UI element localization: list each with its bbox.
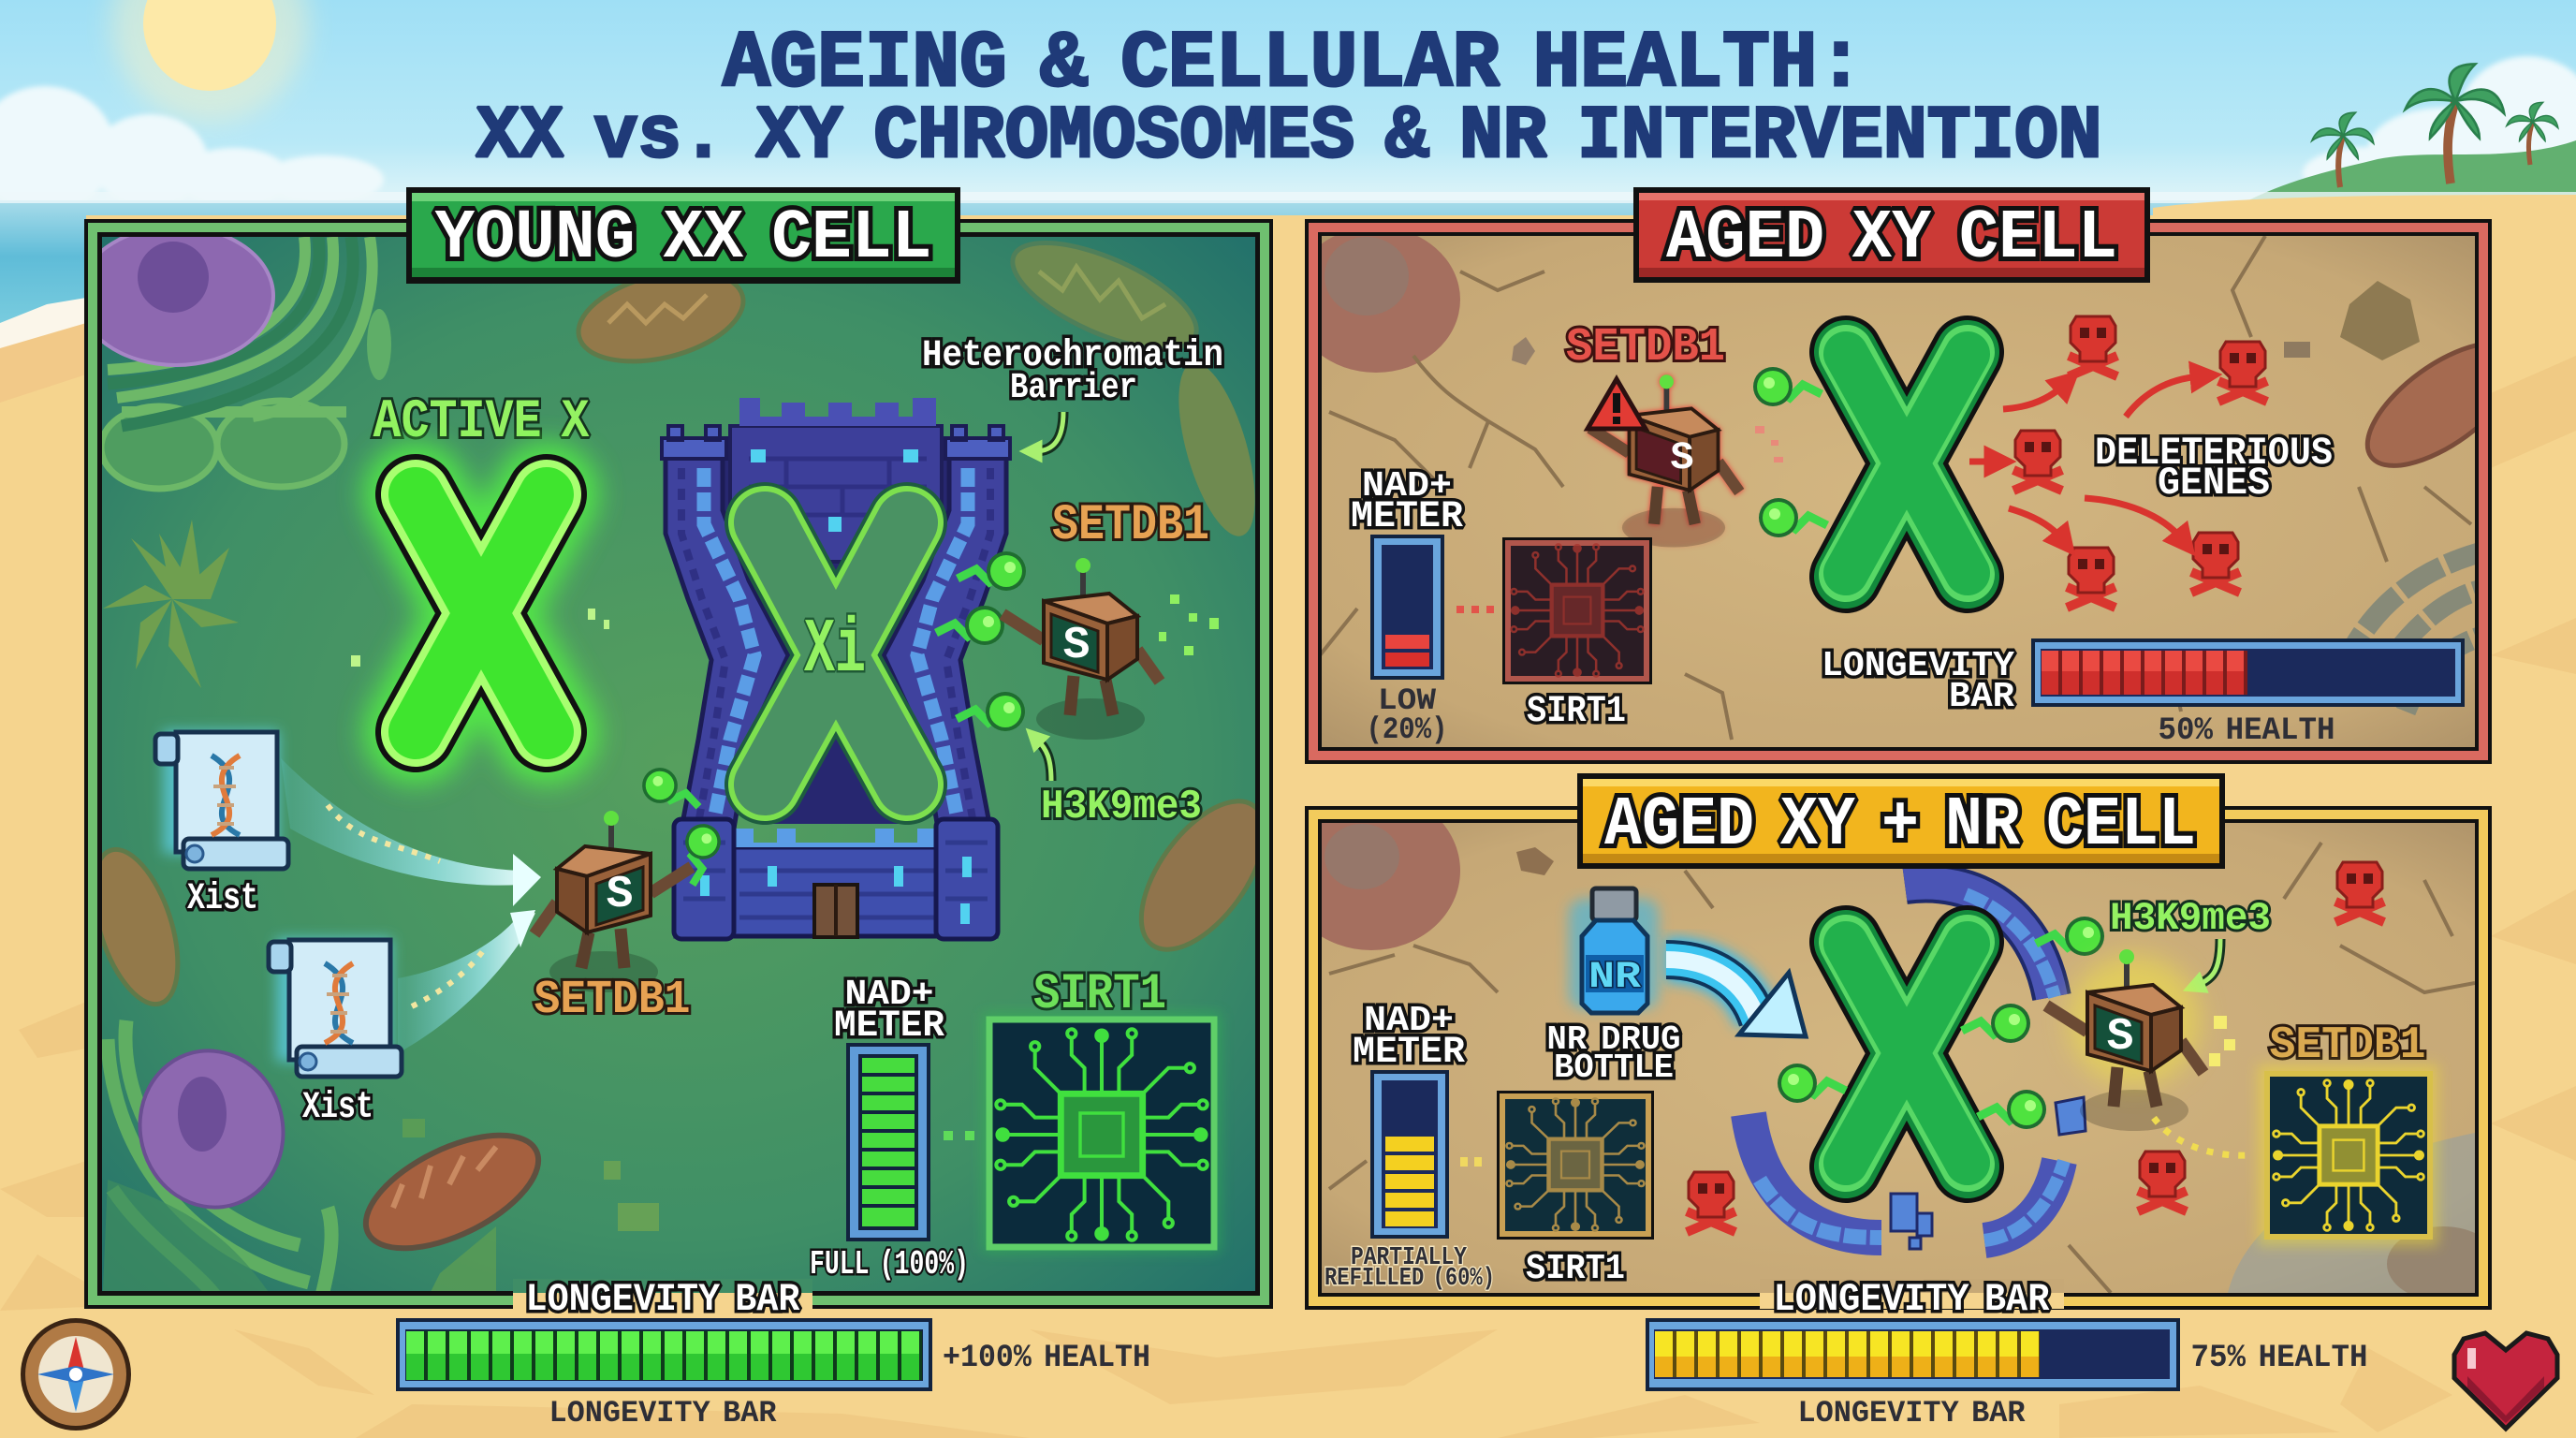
SIRT1 chip dim (1499, 1093, 1652, 1238)
castle side walls (662, 426, 1010, 829)
H3K9me3 marks restored (1778, 917, 2104, 1129)
label: SETDB1 gold: SETDB1 (2269, 1020, 2426, 1071)
cell organelles background (77, 221, 1288, 1311)
label: longevity bar aged (1822, 646, 2014, 717)
icon: compass (21, 1318, 131, 1431)
arrow: H3K9me3 (1037, 740, 1051, 781)
aged X chromosome rescued (1846, 942, 1968, 1167)
castle back wall (730, 398, 942, 562)
red arrows from X to genes (1969, 376, 2200, 538)
label: H3K9me3: H3K9me3 (1041, 784, 1202, 830)
robot: SETDB1 lower (534, 811, 692, 992)
longevity bar aged (2031, 638, 2465, 707)
text: partially refilled (1325, 1244, 1495, 1293)
dotted link: SETDB1 to SIRT1 (2154, 1118, 2248, 1155)
longevity bar NR (1646, 1318, 2180, 1391)
label: longevity bar aged: BAR (1949, 677, 2014, 717)
text: partially refilled: REFILLED (60%) (1325, 1265, 1495, 1293)
text: partially refilled: PARTIALLY (1351, 1244, 1468, 1272)
label: NAD+ meter young: METER (834, 1005, 944, 1048)
text: 75% health: 75% HEALTH (2190, 1341, 2368, 1376)
icon: Xist scroll 2 (269, 938, 402, 1129)
label: NR drug bottle: NR DRUG (1546, 1020, 1681, 1059)
label: SIRT1 young: SIRT1 (1033, 966, 1166, 1023)
robot: SETDB1 restored (2046, 949, 2203, 1131)
NAD+ meter full (846, 1043, 930, 1241)
label: H3K9me3 NR: H3K9me3 (2110, 896, 2271, 941)
label: NAD+ meter young (834, 975, 944, 1048)
label: deleterious genes: DELETERIOUS (2095, 431, 2333, 476)
castle: heterochromatin barrier (662, 398, 1010, 939)
robot: SETDB1 restored: S (2107, 1012, 2133, 1063)
label: NAD+ meter aged: METER (1351, 496, 1463, 538)
label: deleterious genes (2095, 431, 2333, 506)
label: active X: ACTIVE X (373, 392, 590, 453)
label: NAD+ meter NR: METER (1353, 1032, 1465, 1074)
label: NAD+ meter NR (1353, 1001, 1465, 1074)
palm trees (2312, 64, 2558, 187)
NAD+ meter partially refilled (1370, 1070, 1449, 1239)
skulls NR (1687, 862, 2384, 1232)
label: heterochromatin barrier (922, 335, 1223, 408)
NR drug bottle: NR (1588, 957, 1641, 999)
aged X chromosome (1846, 352, 1968, 577)
icon: Xist scroll 1: Xist (187, 878, 258, 920)
robot: SETDB1 upper (1003, 558, 1160, 740)
label: heterochromatin barrier: Heterochromatin (922, 335, 1223, 377)
title: XX vs. XY CHROMOSOMES & NR INTERVENTION (476, 95, 2102, 180)
label: NR drug bottle: BOTTLE (1554, 1049, 1674, 1087)
text: +100% health: +100% HEALTH (943, 1341, 1150, 1376)
inactive X: Xi (765, 522, 907, 785)
cracked cell background (1292, 227, 2539, 740)
deleterious gene skulls (2013, 316, 2267, 608)
SIRT1 chip gold (2258, 1064, 2438, 1246)
heading badge: young XX cell: YOUNG XX CELL (434, 199, 932, 278)
label: full 100%: FULL (100%) (810, 1245, 969, 1284)
label: SETDB1 lower: SETDB1 (534, 974, 691, 1027)
beam: Xist to SETDB1 (281, 758, 541, 1053)
label: SETDB1 upper: SETDB1 (1052, 497, 1209, 554)
label: NR drug bottle (1546, 1020, 1681, 1087)
icon: heart (2454, 1333, 2557, 1429)
robot: SETDB1 lower: S (607, 870, 633, 920)
label: SIRT1 aged: SIRT1 (1527, 691, 1626, 733)
robot: SETDB1 damaged (1590, 374, 1739, 547)
text: low 20%: LOW (1378, 683, 1437, 718)
title (476, 19, 2102, 180)
active X chromosome (416, 494, 547, 732)
label: NAD+ meter aged: NAD+ (1362, 466, 1452, 506)
label: NAD+ meter aged (1351, 466, 1463, 538)
label: heterochromatin barrier: Barrier (1010, 368, 1137, 408)
label: SETDB1 red: SETDB1 (1566, 321, 1725, 374)
panel: aged XY cell (1292, 187, 2539, 764)
NAD+ meter low (1370, 535, 1444, 680)
label: SIRT1 NR: SIRT1 (1526, 1249, 1625, 1289)
icon: Xist scroll 2: Xist (302, 1087, 373, 1129)
icon: warning triangle (1588, 379, 1646, 429)
inactive X: Xi: Xi (804, 607, 866, 694)
text: 50% health: 50% HEALTH (2159, 713, 2334, 749)
label: longevity bar aged: LONGEVITY (1822, 646, 2014, 686)
H3K9me3 marks on castle (637, 551, 1026, 887)
text: longevity bar young caption: LONGEVITY BAR (549, 1396, 777, 1431)
sun (111, 0, 308, 122)
arrow: NR to X (1666, 960, 1806, 1036)
SIRT1 chip active (983, 1013, 1221, 1253)
heading badge: aged XY cell: AGED XY CELL (1666, 199, 2117, 278)
label: NAD+ meter NR: NAD+ (1364, 1001, 1454, 1041)
frame gap label: longevity bar NR: LONGEVITY BAR (1773, 1277, 2050, 1322)
robot: SETDB1 damaged: S (1670, 435, 1694, 480)
panel: young XX cell (77, 219, 1288, 1322)
H3K9me3 marks aged (1753, 367, 1827, 537)
text: low 20%: (20%) (1367, 712, 1447, 747)
arrow: H3K9me3 NR (2198, 939, 2220, 985)
frame gap label: longevity bar young: LONGEVITY BAR (526, 1277, 800, 1322)
heading badge: aged XY + NR cell: AGED XY + NR CELL (1604, 786, 2196, 865)
panel: aged XY + NR cell (1282, 773, 2499, 1322)
text: low 20% (1367, 683, 1447, 747)
icon: Xist scroll 1 (155, 730, 288, 920)
title: AGEING & CELLULAR HEALTH: (723, 19, 1865, 110)
text: longevity bar NR caption: LONGEVITY BAR (1797, 1396, 2026, 1431)
robot: SETDB1 upper: S (1063, 621, 1090, 671)
cracked cell background (1282, 791, 2499, 1301)
SIRT1 chip damaged (1504, 539, 1650, 682)
arrow: to barrier (1035, 412, 1063, 451)
castle gate (674, 819, 998, 939)
NR drug bottle (1569, 888, 1659, 1013)
longevity bar young (396, 1318, 932, 1391)
broken castle pieces (1749, 884, 2086, 1249)
label: deleterious genes: GENES (2158, 461, 2270, 506)
label: NAD+ meter young: NAD+ (844, 975, 934, 1015)
